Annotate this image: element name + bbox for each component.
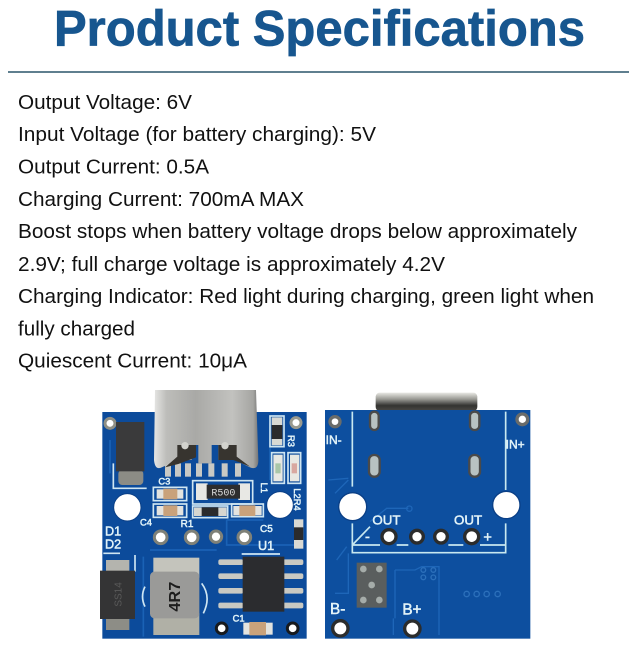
silkscreen labels back: + [483,530,492,546]
silkscreen labels front: R3 [286,435,296,447]
specification list: Charging Current: 700mA MAX [18,189,304,211]
specification list: Boost stops when battery voltage drops below approximately [18,221,577,243]
inductor [150,558,199,635]
specification list: Quiescent Current: 10μA [18,350,248,372]
traces back [328,478,439,635]
silkscreen labels back: IN- [326,433,342,447]
silkscreen labels back: OUT [454,513,482,528]
silkscreen labels front: D1 [105,524,121,538]
silkscreen labels front: D2 [105,537,121,551]
inductor: 4R7 [167,582,184,612]
silkscreen labels front: R1 [181,519,194,530]
USB shell back [376,393,477,411]
silkscreen labels front: L1 [259,483,269,493]
silkscreen labels back [326,433,525,619]
front circuit board [100,390,307,639]
specification list: 2.9V; full charge voltage is approximately 4.2V [18,254,446,276]
resistor R500: R500 [211,487,235,498]
solder pads back [330,414,528,636]
silkscreen labels front: U1 [258,539,274,553]
silkscreen labels back: OUT [372,513,400,528]
silkscreen labels back: B- [330,601,345,618]
silkscreen outlines [103,416,301,613]
mounting holes back [339,491,520,521]
specification list: Charging Indicator: Red light during charging, green light when [18,286,594,308]
resistor R500 [196,483,250,500]
silkscreen outlines back [352,412,506,553]
board substrate back [325,410,530,639]
connector shell [154,390,258,468]
divider line [8,71,629,73]
small resistor [194,507,227,516]
specification list: Input Voltage (for battery charging): 5V [18,124,377,146]
silkscreen labels front: C3 [158,476,170,486]
specification list: Output Current: 0.5A [18,156,210,178]
connector pins [165,463,241,477]
back circuit board [325,393,530,639]
vias [421,568,500,597]
exposed thermal pad [357,563,387,608]
specification list: fully charged [18,318,135,340]
silkscreen labels back: B+ [402,602,422,619]
silkscreen labels back: - [365,529,370,545]
LEDs and side resistors [272,417,303,549]
USB-C connector [154,390,258,477]
silkscreen labels back: IN+ [506,437,525,451]
silkscreen labels front: L2R4 [292,488,302,511]
specification list: Output Voltage: 6V [18,92,193,114]
through-hole pads front [105,418,301,634]
silkscreen labels front: C4 [140,518,152,528]
chip U1 [218,557,303,612]
diode D2: SS14 [114,582,125,607]
diode D2 [100,560,135,630]
title: Product Specifications [54,0,585,56]
diode D1 [116,422,144,485]
silkscreen labels front [105,435,302,624]
silkscreen labels front: C1 [233,614,245,624]
board substrate [102,412,307,639]
capacitors [157,489,273,635]
copper traces [110,423,303,637]
mounting holes front [114,492,293,521]
USB tabs back [369,412,480,477]
specification list [18,92,594,372]
silkscreen labels front: C5 [260,524,273,535]
